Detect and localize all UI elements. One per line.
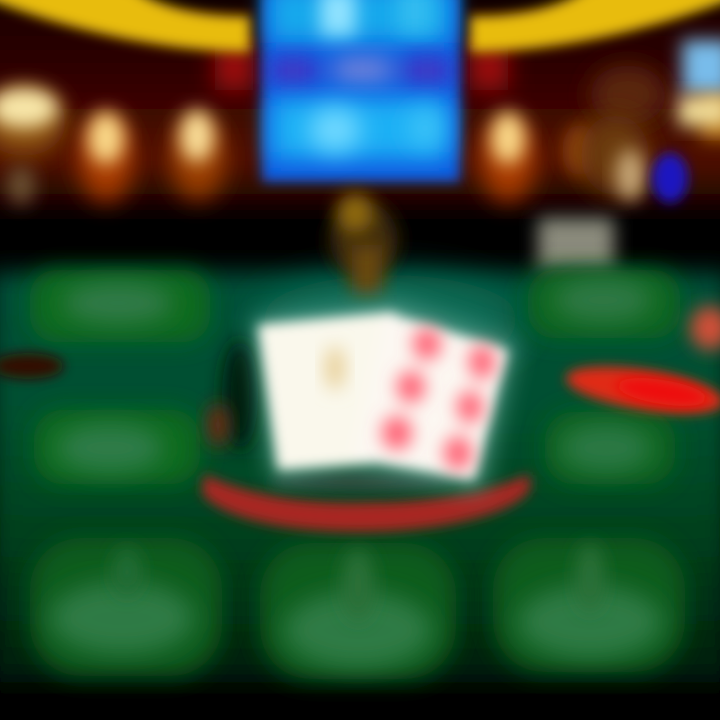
gold trophy xyxy=(330,193,398,295)
screen middle band xyxy=(270,58,450,84)
red chip top right xyxy=(690,306,720,350)
blue screen xyxy=(262,0,460,182)
screen upper highlights xyxy=(320,0,432,36)
red table arc xyxy=(202,474,530,532)
panel: green top left xyxy=(30,270,210,342)
wall lamps xyxy=(0,88,536,205)
card pips xyxy=(382,328,495,470)
screen lower cyan panel xyxy=(270,98,450,160)
card halo xyxy=(252,302,518,492)
shadow beside cards xyxy=(222,340,258,450)
playing cards xyxy=(258,312,508,480)
screen upper cyan panel xyxy=(268,0,452,43)
red pillar accents xyxy=(215,45,508,90)
right side decoration xyxy=(562,40,720,203)
grey chips top right xyxy=(538,218,614,270)
panel: green middle left xyxy=(34,410,200,484)
red oval right xyxy=(563,358,720,422)
yellow ceiling arch right xyxy=(470,0,720,52)
card centre emblem xyxy=(325,346,345,390)
panel: green top right xyxy=(528,270,680,338)
dark red chip left xyxy=(0,353,64,379)
yellow ceiling arch left xyxy=(0,0,250,52)
background wall xyxy=(0,0,720,215)
card: right xyxy=(352,312,508,480)
shadow under cards xyxy=(270,471,450,493)
panel: green middle right xyxy=(545,412,675,484)
teal glow behind cards xyxy=(260,275,520,365)
panel: green bottom right xyxy=(493,538,685,672)
panel: green bottom left xyxy=(30,538,222,676)
screen lower highlights xyxy=(309,108,441,152)
green felt table xyxy=(0,272,720,682)
red marker left of cards xyxy=(207,403,229,447)
card: left xyxy=(258,312,412,470)
panel: green bottom center xyxy=(260,543,456,679)
